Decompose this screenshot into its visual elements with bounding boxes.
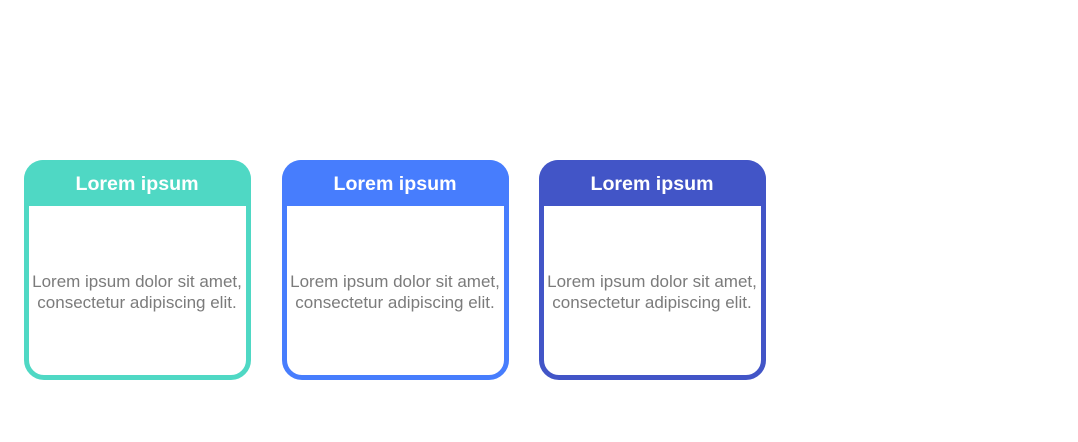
text block: indigo card: Lorem ipsum dolor sit amet, [547,272,757,291]
text block: teal card: Lorem ipsum dolor sit amet, [32,272,242,291]
text block: blue card [290,272,500,312]
text block: blue card: consectetur adipiscing elit. [295,293,495,312]
text block: blue card: Lorem ipsum dolor sit amet, [290,272,500,291]
heading: indigo card [539,160,766,206]
text block: indigo card [547,272,757,312]
heading: blue card [282,160,509,206]
card: blue [282,160,509,380]
text block: teal card: consectetur adipiscing elit. [37,293,237,312]
heading: teal card [24,160,251,206]
text block: indigo card: consectetur adipiscing elit. [552,293,752,312]
heading: indigo card: Lorem ipsum [590,173,714,195]
card: indigo [539,160,766,380]
heading: teal card: Lorem ipsum [75,173,199,195]
heading: blue card: Lorem ipsum [333,173,457,195]
card: teal [24,160,251,380]
text block: teal card [32,272,242,312]
